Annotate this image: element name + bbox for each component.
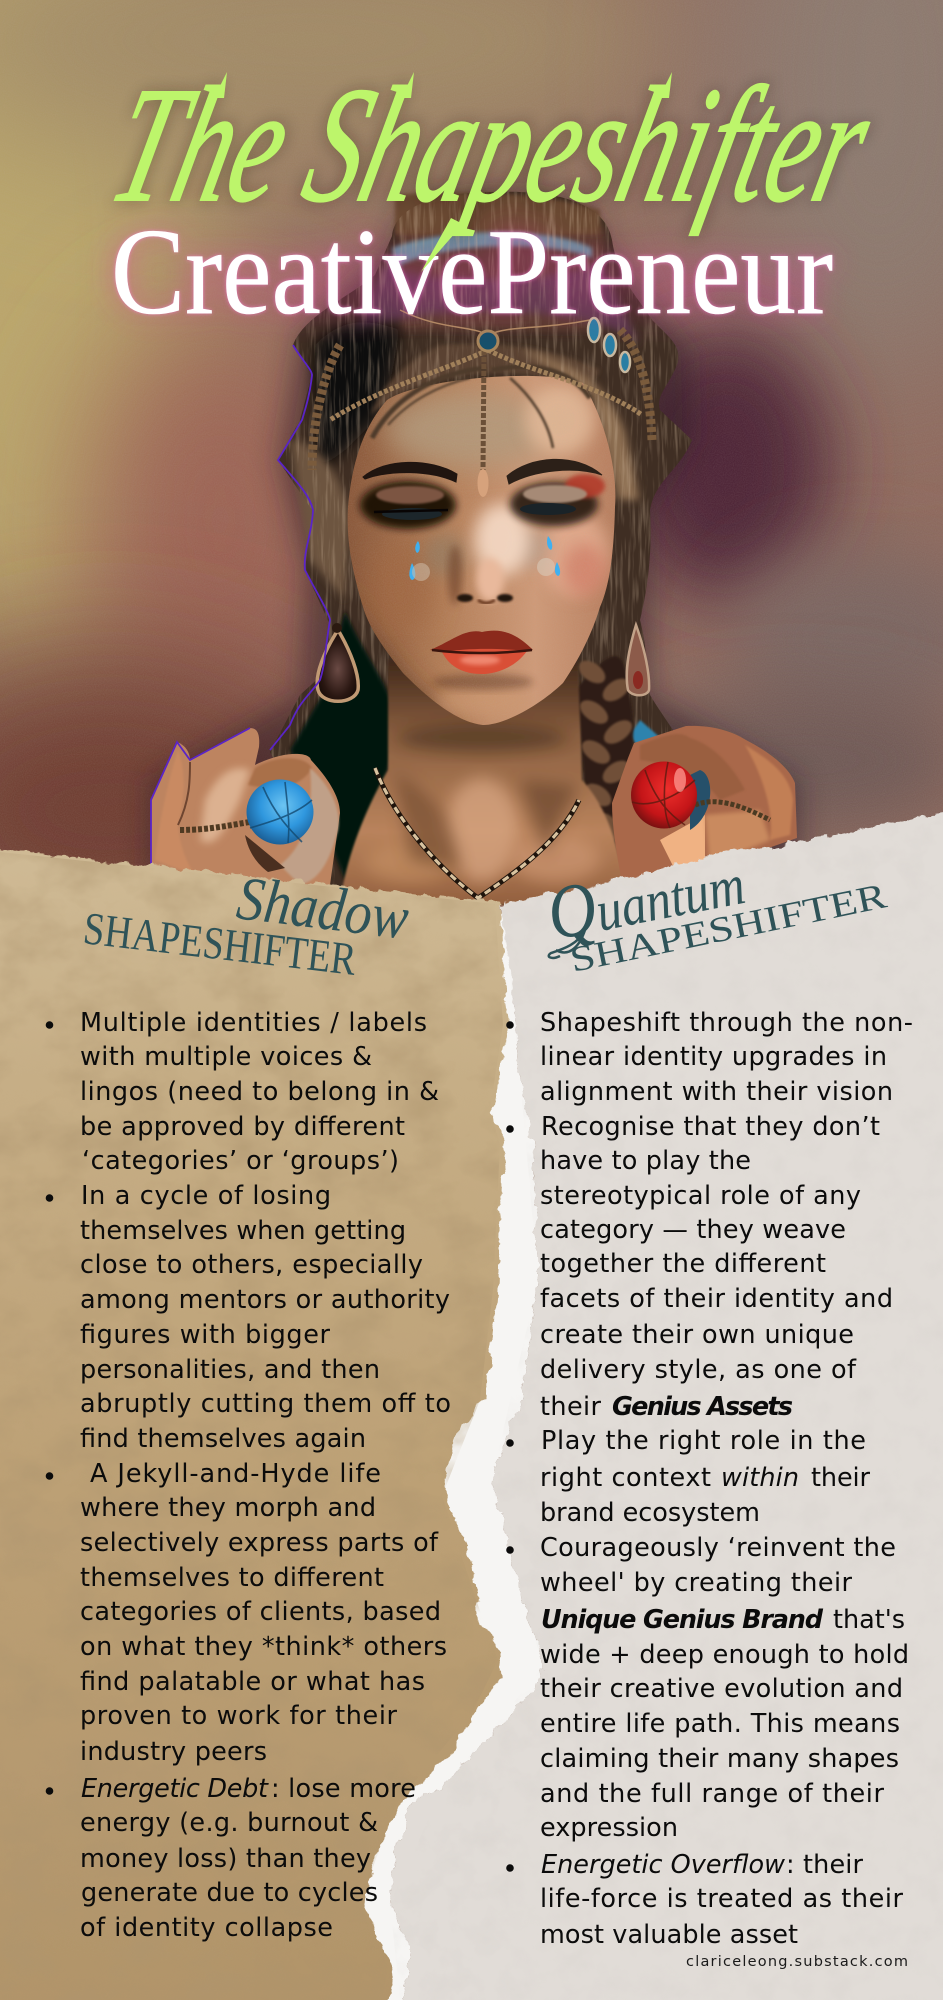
text panel: shadow list xyxy=(46,1008,451,1943)
bullet 4 xyxy=(506,1533,909,1843)
bullet 2: together the different xyxy=(540,1249,826,1279)
bullet 4: generate due to cycles xyxy=(81,1878,378,1908)
bullet 4: wide + deep enough to hold xyxy=(540,1640,909,1670)
forehead hair wisps xyxy=(372,367,590,448)
nose xyxy=(448,504,530,605)
necklace xyxy=(375,768,579,898)
bullet 5: Energetic Overflow xyxy=(541,1850,785,1880)
background gradient xyxy=(0,0,943,1000)
bullet 2: close to others, especially xyxy=(80,1250,423,1280)
bullet 4: Unique Genius Brand xyxy=(541,1605,824,1635)
heading: Quantum Shapeshifter xyxy=(540,836,890,980)
bullet 1: Shapeshift through the non- xyxy=(540,1008,913,1038)
bullet 3: industry peers xyxy=(80,1737,267,1767)
purple outline xyxy=(151,345,330,868)
bullet 4: : lose more xyxy=(271,1774,416,1804)
bullet 4: energy (e.g. burnout & xyxy=(80,1808,378,1838)
bullet 3: within xyxy=(721,1463,799,1493)
bullet 2: personalities, and then xyxy=(80,1355,380,1385)
eye right xyxy=(507,459,605,526)
bullet 1: alignment with their vision xyxy=(540,1077,893,1107)
face xyxy=(340,370,620,730)
blue orb xyxy=(246,780,314,844)
bullet 4: entire life path. This means xyxy=(540,1709,900,1739)
bullet 2: Recognise that they don’t xyxy=(541,1112,880,1142)
bullet 2 xyxy=(506,1112,893,1422)
bullet 1: ‘categories’ or ‘groups’) xyxy=(82,1146,399,1176)
bullet 2 xyxy=(46,1181,451,1454)
bullet 5 xyxy=(506,1850,904,1950)
tears xyxy=(409,536,560,581)
bullet 3 xyxy=(506,1426,871,1528)
neck and chest xyxy=(340,660,628,905)
braid right xyxy=(575,656,636,895)
bullet 4: of identity collapse xyxy=(80,1913,333,1943)
bullet 2: abruptly cutting them off to xyxy=(80,1389,451,1419)
red orb xyxy=(631,762,697,828)
heading: Shadow Shapeshifter: Shadow xyxy=(233,864,412,953)
bullet 2: category — they weave xyxy=(540,1215,846,1245)
bullet 3: where they morph and xyxy=(80,1493,376,1523)
bullet 1 xyxy=(46,1008,439,1176)
bullet 3: on what they *think* others xyxy=(80,1632,447,1662)
bullet 5: most valuable asset xyxy=(540,1920,798,1950)
bullet 4 xyxy=(46,1774,416,1943)
bullet 3: brand ecosystem xyxy=(540,1498,760,1528)
bullet 3: categories of clients, based xyxy=(80,1597,441,1627)
bullet 1: linear identity upgrades in xyxy=(540,1042,887,1072)
bullet 3: selectively express parts of xyxy=(80,1528,439,1558)
heading: Quantum Shapeshifter: SHAPESHIFTER xyxy=(567,875,890,980)
bullet 1: be approved by different xyxy=(80,1112,405,1142)
bullet 4: that's xyxy=(833,1605,905,1635)
hair mass xyxy=(270,192,692,905)
bullet 4: expression xyxy=(540,1813,678,1843)
diadem xyxy=(312,310,652,497)
bullet 2: stereotypical role of any xyxy=(540,1181,861,1211)
bullet 1 xyxy=(506,1008,913,1107)
bullet 4: wheel' by creating their xyxy=(540,1568,853,1598)
portrait figure xyxy=(150,190,800,910)
right hand xyxy=(612,726,797,888)
bullet 2: their xyxy=(540,1392,602,1422)
heading: Shadow Shapeshifter: SHAPESHIFTER xyxy=(81,902,359,985)
bullet 3: Play the right role in the xyxy=(541,1426,866,1456)
bullet 4: claiming their many shapes xyxy=(540,1744,899,1774)
lips xyxy=(430,631,533,674)
eye left xyxy=(360,462,457,529)
bullet 2: find themselves again xyxy=(80,1424,366,1454)
text panel: quantum list xyxy=(506,1008,913,1950)
bullet 1: Multiple identities / labels xyxy=(80,1008,427,1038)
footer credit: clariceleong.substack.com xyxy=(686,1954,908,1970)
dark hair left xyxy=(290,610,400,880)
title: CreativePreneur: CreativePreneur xyxy=(111,203,833,340)
bullet 1: with multiple voices & xyxy=(80,1042,372,1072)
bullet 4: their creative evolution and xyxy=(540,1674,903,1704)
bullet 2: themselves when getting xyxy=(80,1216,406,1246)
panel: quantum paper xyxy=(380,800,943,2000)
title: CreativePreneur: CreativePreneur xyxy=(111,203,833,340)
bullet 5: life-force is treated as their xyxy=(540,1884,904,1914)
bullet 4: and the full range of their xyxy=(540,1779,885,1809)
earring left xyxy=(317,623,358,701)
bullet 2: among mentors or authority xyxy=(80,1285,450,1315)
bullet 3: themselves to different xyxy=(80,1563,384,1593)
bullet 4: Energetic Debt xyxy=(81,1774,269,1804)
bullet 2: create their own unique xyxy=(540,1320,854,1350)
bullet 3: proven to work for their xyxy=(80,1701,398,1731)
bullet 3: A Jekyll-and-Hyde life xyxy=(90,1459,381,1489)
bullet 2: In a cycle of losing xyxy=(81,1181,331,1211)
bullet 3: right context xyxy=(540,1463,711,1493)
heading: Quantum Shapeshifter: Quantum xyxy=(540,836,751,957)
left hand xyxy=(151,728,340,895)
bullet 2: Genius Assets xyxy=(612,1392,793,1422)
bullet 4: money loss) than they xyxy=(80,1844,371,1874)
blue hair streak right xyxy=(630,720,672,768)
title: CreativePreneur: CreativePreneur xyxy=(111,203,833,340)
bullet 2: have to play the xyxy=(540,1146,751,1176)
figure dark halo xyxy=(150,192,800,880)
bullet 2: facets of their identity and xyxy=(540,1284,893,1314)
bullet 4: Courageously ‘reinvent the xyxy=(540,1533,896,1563)
bullet 2: delivery style, as one of xyxy=(540,1355,857,1385)
bullet 3: their xyxy=(811,1463,871,1493)
bullet 3: find palatable or what has xyxy=(80,1667,425,1697)
bullet 3 xyxy=(46,1459,447,1767)
bullet 2: figures with bigger xyxy=(80,1320,331,1350)
bullet 5: : their xyxy=(786,1850,864,1880)
hair shading xyxy=(270,190,700,910)
earring right xyxy=(627,625,649,695)
panel: shadow paper xyxy=(0,849,510,2000)
bullet 1: lingos (need to belong in & xyxy=(80,1077,439,1107)
panel: torn white backing xyxy=(340,900,543,2000)
heading: Shadow Shapeshifter xyxy=(81,864,412,985)
